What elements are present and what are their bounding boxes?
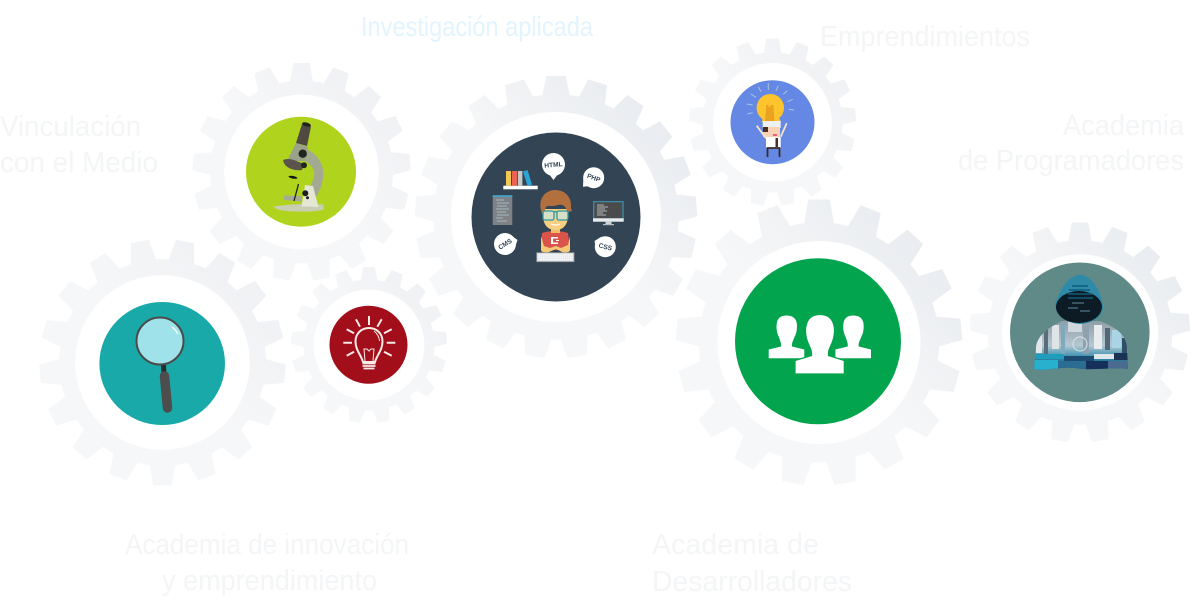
icon: hooded hacker	[1034, 275, 1129, 370]
bubble: HTML: HTML	[544, 161, 563, 170]
label: Academia de innovación y emprendimiento	[125, 529, 409, 597]
label: Vinculación con el Medio: con el Medio	[0, 147, 158, 179]
gear: microscope	[190, 61, 413, 283]
icon disc: lime	[246, 117, 356, 227]
panel: Academia de innovación gear (magnifier)	[37, 237, 288, 488]
icon disc: green	[735, 258, 901, 424]
gear: idea person	[687, 37, 858, 207]
panel: Emprendimientos gear	[687, 37, 858, 207]
icon disc: red	[330, 306, 408, 384]
bubble: CSS	[594, 236, 616, 257]
label: Academia de Desarrolladores	[652, 529, 852, 598]
panel: Academia de innovación gear (bulb)	[289, 265, 449, 425]
icon: code document	[493, 195, 512, 225]
icon disc: slate teal	[1010, 262, 1150, 402]
icon: monitor	[593, 201, 624, 225]
panel: Academia de Desarrolladores gear	[673, 197, 965, 488]
label: Academia de Programadores: Academia	[1063, 110, 1185, 142]
panel: Academia de Programadores gear	[968, 220, 1192, 445]
label: Academia de Programadores	[958, 110, 1185, 177]
label: Academia de Desarrolladores: Academia de	[652, 529, 819, 561]
gear: magnifier	[37, 237, 288, 488]
label: Academia de innovación y emprendimiento: y emprendimiento	[162, 565, 377, 597]
bubble: HTML	[542, 153, 565, 180]
gear: hacker	[968, 220, 1192, 445]
bubble: PHP: PHP	[586, 173, 602, 184]
label: Academia de innovación y emprendimiento: Academia de innovación	[125, 529, 409, 561]
bubble: CMS: CMS	[497, 238, 514, 252]
label: Emprendimientos: Emprendimientos	[820, 21, 1030, 53]
gear: people	[673, 197, 965, 488]
bubble: PHP	[583, 167, 604, 188]
icon: magnifying glass	[136, 318, 184, 408]
bubble: CSS: CSS	[598, 242, 613, 253]
icon disc: blue	[730, 80, 814, 164]
icon: bookshelf	[503, 170, 538, 189]
icon: group of people	[769, 314, 871, 374]
gear: central	[412, 73, 700, 361]
label: Vinculación con el Medio: Vinculación	[0, 111, 141, 143]
label: Vinculación con el Medio	[0, 111, 158, 179]
icon disc: teal	[99, 302, 225, 425]
panel: Investigación aplicada gear	[412, 73, 700, 361]
label: Academia de Programadores: de Programadores	[958, 145, 1184, 177]
icon disc: dark blue	[472, 132, 640, 302]
icon: person with lightbulb head	[747, 83, 794, 157]
label: Investigación aplicada: Investigación aplicada	[361, 11, 593, 42]
icon: microscope	[274, 121, 324, 212]
gear: bulb	[289, 265, 449, 425]
label: Academia de Desarrolladores: Desarrolladores	[652, 566, 852, 598]
icon: developer with glasses	[537, 190, 574, 262]
icon: lightbulb	[343, 316, 395, 368]
bubble: CMS	[494, 233, 518, 255]
panel: Vinculación con el Medio gear	[190, 61, 413, 283]
